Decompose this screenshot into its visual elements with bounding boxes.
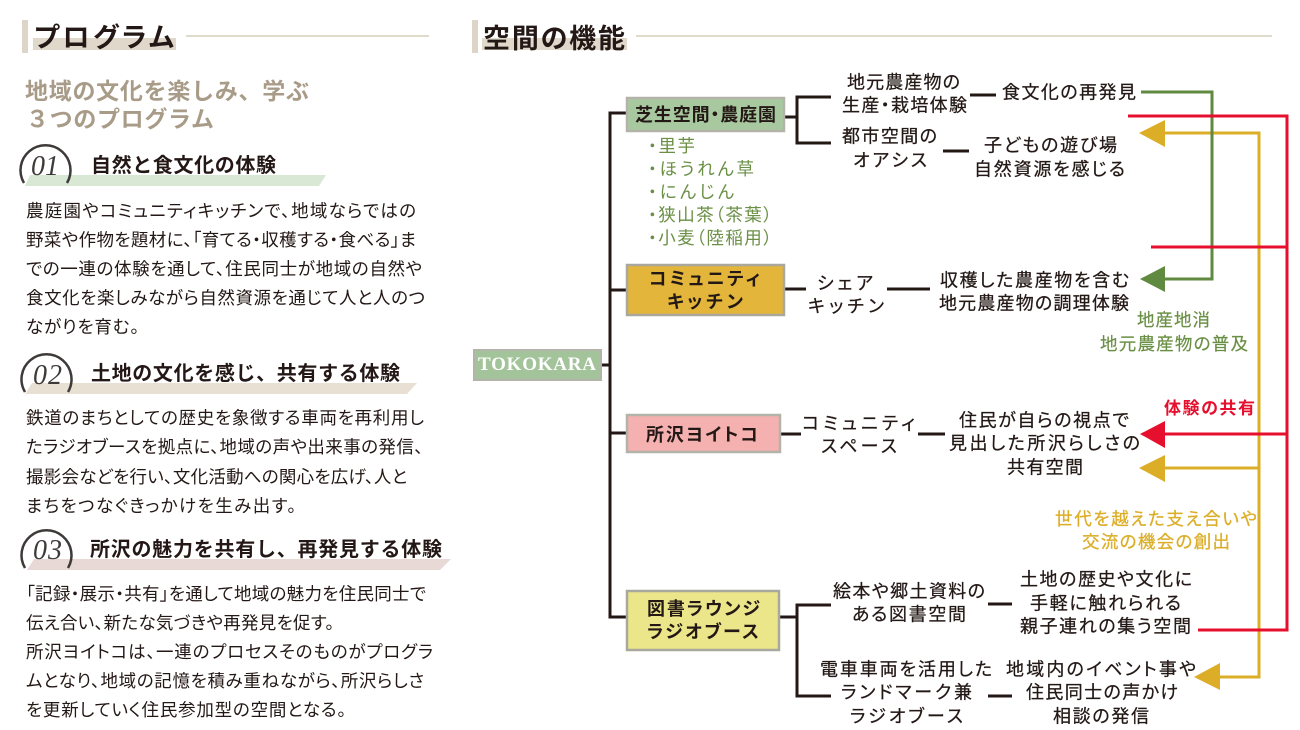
program 03 text: ムとなり、地域の記憶を積み重ねながら、所沢らしさ	[26, 671, 424, 691]
callout: intergenerational support: 交流の機会の創出	[1082, 532, 1230, 552]
program 03 heading	[22, 530, 451, 570]
subtitle: 地域の文化を楽しみ、学ぶ	[25, 78, 309, 104]
labels: library branch: 絵本や郷土資料の	[833, 582, 985, 602]
labels: lawn and farm branch: 生産・栽培体験	[842, 96, 967, 116]
callout: shared experience: 体験の共有	[1164, 399, 1255, 418]
subtitle: ３つのプログラム	[26, 106, 214, 132]
labels: Yoitoko branch: 見出した所沢らしさの	[949, 434, 1140, 454]
root node: TOKOKARA	[474, 350, 601, 380]
callout: intergenerational support	[1055, 509, 1257, 552]
program 01 text: ながりを育む。	[26, 317, 139, 337]
labels: library branch: 地域内のイベント事や	[1006, 660, 1196, 680]
program 03 text: を更新していく住民参加型の空間となる。	[26, 700, 346, 720]
labels: lawn and farm branch: 自然資源を感じる	[974, 160, 1125, 180]
program 01 text: 食文化を楽しみながら自然資源を通じて人と人のつ	[26, 288, 425, 308]
labels: lawn and farm branch: 食文化の再発見	[1002, 83, 1136, 103]
labels: library branch: 親子連れの集う空間	[1020, 617, 1191, 637]
program 03 text	[26, 584, 433, 720]
crop list: ・ほうれん草	[648, 159, 754, 179]
heading: program	[22, 20, 429, 53]
callout: local production: 地産地消	[1137, 310, 1210, 330]
labels: library branch: ある図書空間	[852, 605, 966, 625]
labels: kitchen branch: 地元農産物の調理体験	[939, 294, 1129, 314]
callout: local production	[1100, 310, 1248, 354]
root node: TOKOKARA: TOKOKARA	[478, 354, 596, 375]
node: library lounge	[627, 591, 779, 650]
program 02 heading: 02	[33, 360, 62, 391]
labels: lawn and farm branch: 都市空間の	[842, 127, 937, 147]
labels: library branch: ランドマーク兼	[841, 683, 972, 703]
program 01 text: 野菜や作物を題材に、「育てる・収穫する・食べる」ま	[26, 230, 416, 250]
crop list: ・里芋	[648, 136, 695, 156]
program 03 heading: 所沢の魅力を共有し、再発見する体験	[90, 537, 442, 561]
labels: Yoitoko branch: コミュニティ	[802, 414, 915, 434]
program 02 text: 鉄道のまちとしての歴史を象徴する車両を再利用し	[26, 408, 424, 428]
labels: lawn and farm branch	[842, 73, 1136, 180]
labels: library branch: 相談の発信	[1053, 707, 1149, 727]
labels: kitchen branch: 収穫した農産物を含む	[940, 271, 1129, 291]
arrow: green local food	[1140, 92, 1212, 292]
node: community kitchen: コミュニティ	[649, 269, 760, 289]
labels: kitchen branch	[808, 271, 1129, 317]
program 02 text	[26, 408, 424, 516]
crop list: ・小麦（陸稲用）	[648, 228, 772, 248]
callout: intergenerational support: 世代を越えた支え合いや	[1055, 509, 1257, 529]
labels: library branch: ラジオブース	[850, 706, 963, 727]
labels: library branch: 土地の歴史や文化に	[1020, 570, 1192, 590]
callout: local production: 地元農産物の普及	[1100, 334, 1248, 354]
node: library lounge: ラジオブース	[647, 621, 759, 642]
labels: library branch: 電車車両を活用した	[820, 660, 992, 680]
node: lawn and farm	[627, 98, 784, 131]
panel: program	[20, 20, 451, 720]
program 01 heading: 自然と食文化の体験	[91, 153, 276, 177]
node: community kitchen: キッチン	[667, 292, 743, 312]
program 02 text: 撮影会などを行い、文化活動への関心を広げ、人と	[26, 467, 407, 487]
program 03 text: 所沢ヨイトコは、一連のプロセスそのものがプログラ	[26, 642, 433, 662]
labels: library branch: 住民同士の声かけ	[1026, 683, 1178, 703]
labels: library branch: 手軽に触れられる	[1030, 594, 1181, 614]
program 02 text: たラジオブースを拠点に、地域の声や出来事の発信、	[26, 437, 423, 457]
program 03 text: 「記録・展示・共有」を通して地域の魅力を住民同士で	[26, 584, 426, 604]
node: lawn and farm: 芝生空間・農庭園	[635, 104, 776, 125]
program 01 text: 農庭園やコミュニティキッチンで、地域ならではの	[26, 201, 416, 221]
labels: kitchen branch: キッチン	[808, 297, 884, 317]
program 01 text: での一連の体験を通して、住民同士が地域の自然や	[26, 259, 422, 279]
node: community kitchen	[627, 265, 784, 315]
node: Tokorozawa Yoitoko	[627, 415, 780, 452]
heading: program: プログラム	[34, 22, 174, 53]
heading: space functions: 空間の機能	[483, 24, 625, 54]
labels: Yoitoko branch	[802, 411, 1140, 478]
arrow: yellow generation support	[1139, 120, 1259, 690]
crop list: ・狭山茶（茶葉）	[648, 205, 772, 225]
program 02 heading: 土地の文化を感じ、共有する体験	[91, 361, 400, 385]
labels: kitchen branch: シェア	[817, 274, 873, 294]
labels: Yoitoko branch: 住民が自らの視点で	[959, 411, 1129, 431]
labels: lawn and farm branch: オアシス	[853, 151, 927, 171]
labels: Yoitoko branch: 共有空間	[1007, 458, 1083, 478]
panel: space functions	[472, 20, 1287, 727]
node: Tokorozawa Yoitoko: 所沢ヨイトコ	[646, 425, 758, 445]
tree connectors	[601, 95, 1012, 696]
heading: space functions	[472, 20, 1272, 54]
program 03 heading: 03	[33, 535, 62, 566]
program 01 text	[26, 201, 425, 337]
program 03 text: 伝え合い、新たな気づきや再発見を促す。	[26, 613, 334, 633]
program 01 heading	[20, 145, 326, 186]
program 02 text: まちをつなぐきっかけを生み出す。	[26, 496, 296, 516]
node: library lounge: 図書ラウンジ	[647, 598, 760, 619]
labels: library branch	[820, 570, 1196, 727]
labels: lawn and farm branch: 子どもの遊び場	[984, 136, 1117, 156]
program 02 heading	[22, 354, 417, 394]
arrow: red shared experience	[1128, 116, 1287, 630]
labels: lawn and farm branch: 地元農産物の	[847, 73, 960, 93]
crop list: ・にんじん	[648, 182, 734, 202]
crop list	[648, 136, 772, 248]
subtitle	[25, 78, 309, 132]
program 01 heading: 01	[31, 151, 59, 182]
labels: Yoitoko branch: スペース	[821, 437, 897, 457]
